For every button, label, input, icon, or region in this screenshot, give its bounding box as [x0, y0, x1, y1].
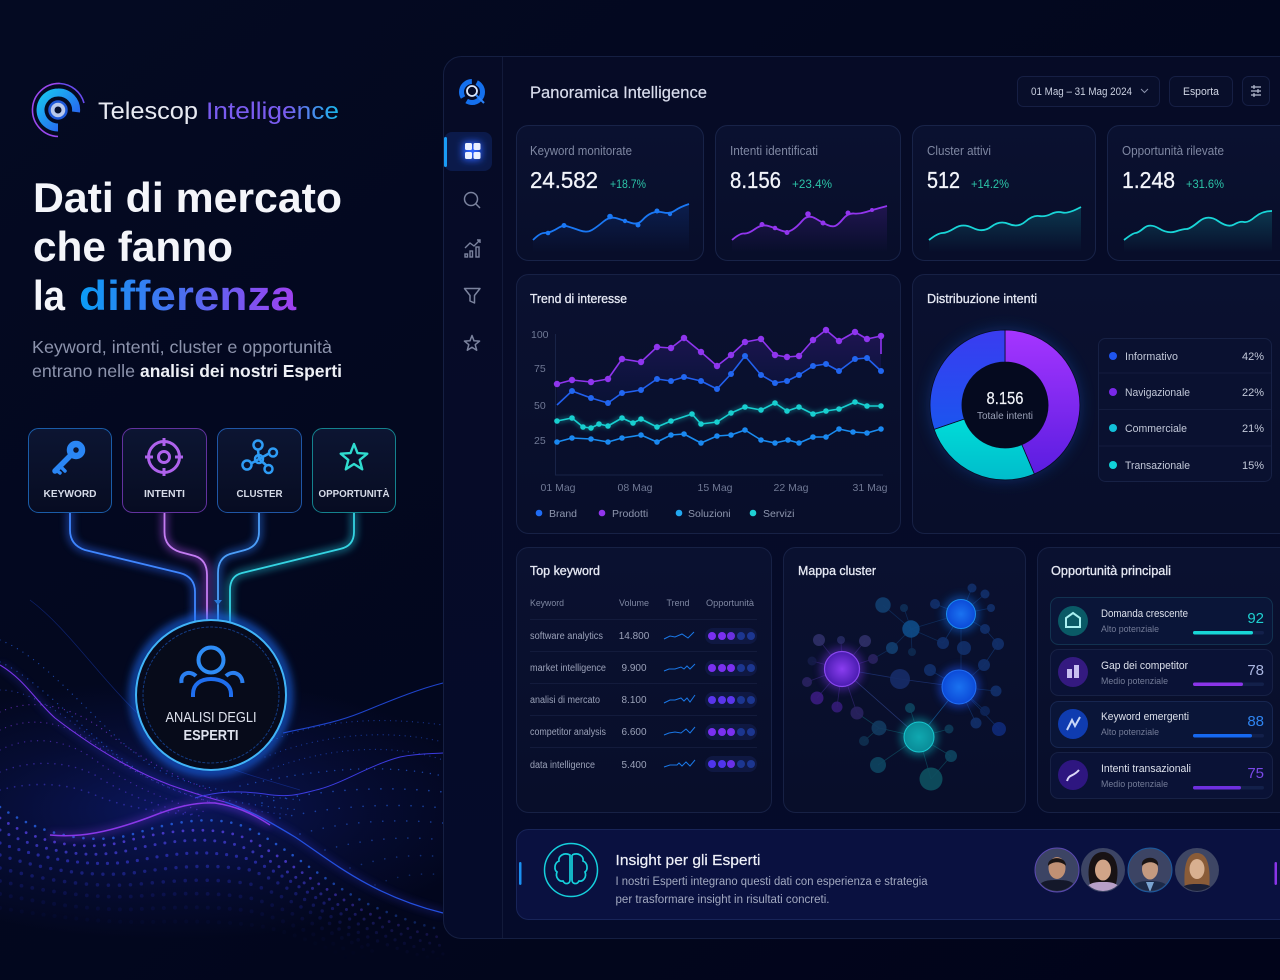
kpi card: intenti: 8.156: [730, 167, 781, 193]
table rows: data intelligence: [530, 760, 595, 771]
opportunity: intenti transazionali: Intenti transazionali: [1101, 763, 1191, 775]
donut chart: Totale intenti: [977, 410, 1033, 422]
chart legend: Servizi: [763, 508, 795, 520]
brand name: Intelligence: [206, 98, 339, 125]
avatar 3: [1128, 848, 1172, 895]
chart legend: [536, 508, 795, 520]
opportunity: gap competitor: Gap dei competitor: [1101, 660, 1188, 672]
icon: key: [55, 444, 82, 473]
kpi card: cluster: 512: [927, 167, 960, 193]
table header: Opportunità: [706, 598, 755, 609]
box: opportunita: OPPORTUNITÀ: [318, 487, 390, 500]
insight text: per trasformare insight in risultati concreti.: [616, 894, 830, 906]
chart legend: Prodotti: [612, 508, 648, 520]
sidebar: [444, 82, 492, 350]
sparkline: [929, 207, 1081, 252]
avatar 1: [1035, 848, 1079, 895]
main headline: che fanno: [33, 223, 233, 270]
opportunity: intenti transazionali: Medio potenziale: [1101, 779, 1168, 790]
donut legend: Transazionale: [1125, 460, 1190, 472]
kpi card: opportunita: [1108, 126, 1280, 260]
x axis labels: 31 Mag: [852, 482, 888, 494]
panel: top keywords: [516, 548, 772, 812]
experts hub circle: [134, 600, 288, 772]
kpi card: intenti: Intenti identificati: [730, 144, 818, 158]
export button: Esporta: [1183, 86, 1220, 98]
settings button: [1242, 76, 1270, 106]
opportunity: domanda crescente: 92: [1247, 610, 1264, 627]
dashboard title: Panoramica Intelligence: [530, 83, 707, 102]
subheading: Keyword, intenti, cluster e opportunità: [32, 337, 332, 357]
donut legend: [1098, 338, 1272, 482]
main headline: [33, 174, 342, 319]
icon: star: [341, 444, 367, 469]
table rows: market intelligence: [530, 663, 606, 674]
opportunity: gap competitor: [1050, 650, 1272, 696]
sparkline: [732, 206, 887, 252]
x axis labels: 08 Mag: [617, 482, 653, 494]
table rows: 8.100: [621, 695, 647, 706]
brand name: [98, 98, 339, 125]
opportunity: domanda crescente: [1050, 598, 1272, 644]
sparkline: [533, 204, 689, 252]
box: cluster: CLUSTER: [236, 488, 283, 500]
kpi card: keyword: 24.582: [530, 167, 598, 193]
donut chart: [930, 330, 1080, 480]
panel: main opportunities: [1038, 548, 1280, 812]
opportunity: keyword emergenti: 88: [1247, 713, 1264, 730]
kpi card: keyword: Keyword monitorate: [530, 144, 632, 158]
table header: [530, 598, 755, 609]
opportunity: domanda crescente: Domanda crescente: [1101, 608, 1188, 620]
export button: [1170, 76, 1232, 106]
kpi card: intenti: [716, 126, 900, 260]
table rows: analisi di mercato: [530, 695, 600, 706]
icon: network: [242, 440, 277, 473]
insight text: [616, 852, 928, 906]
main headline: Dati di mercato: [33, 174, 342, 221]
main headline: la: [33, 272, 66, 319]
box: intenti: INTENTI: [144, 488, 185, 500]
panel: cluster map: Mappa cluster: [798, 563, 877, 578]
icon: app logo: [462, 82, 484, 103]
x axis labels: 15 Mag: [697, 482, 733, 494]
kpi card: keyword: +18.7%: [610, 177, 646, 191]
icon: target: [145, 438, 183, 476]
opportunity: keyword emergenti: Keyword emergenti: [1101, 711, 1189, 723]
avatar 2: [1081, 848, 1125, 895]
brand logo: [32, 83, 84, 136]
table header: Volume: [619, 598, 649, 609]
donut chart: 8.156: [986, 388, 1024, 408]
dashboard panel: [444, 56, 1280, 938]
row sparklines: [664, 632, 695, 767]
date range control: [1018, 76, 1160, 106]
table header: Keyword: [530, 598, 564, 609]
table rows: 5.400: [621, 760, 647, 771]
icon: brain: [544, 844, 598, 896]
x axis labels: 01 Mag: [540, 482, 576, 494]
opportunity scores: [705, 628, 757, 772]
y axis labels: 50: [534, 400, 546, 412]
active nav item: [444, 132, 492, 171]
panel: trend chart: Trend di interesse: [530, 291, 627, 306]
x axis labels: 22 Mag: [773, 482, 809, 494]
box: keyword: KEYWORD: [44, 488, 97, 500]
box: opportunita: [312, 428, 396, 512]
opportunity: keyword emergenti: Alto potenziale: [1101, 727, 1159, 738]
panel: intent distribution: [912, 274, 1280, 534]
chart legend: Soluzioni: [688, 508, 731, 520]
y axis labels: 100: [531, 329, 549, 341]
panel: main opportunities: Opportunità principali: [1051, 563, 1171, 578]
opportunity: intenti transazionali: [1050, 752, 1272, 798]
table rows: 6.600: [621, 727, 647, 738]
x axis labels: [540, 482, 888, 494]
panel: trend chart: [516, 274, 900, 534]
donut legend: Informativo: [1125, 351, 1178, 363]
line chart: [557, 330, 881, 443]
y axis labels: 75: [534, 363, 546, 375]
opportunity: intenti transazionali: 75: [1247, 765, 1264, 782]
opportunity: domanda crescente: Alto potenziale: [1101, 624, 1159, 635]
opportunity: gap competitor: Medio potenziale: [1101, 676, 1168, 687]
donut legend: 42%: [1242, 351, 1264, 363]
subheading: entrano nelle: [32, 361, 135, 381]
date range control: 01 Mag – 31 Mag 2024: [1031, 86, 1132, 98]
connectors to experts: [70, 512, 354, 622]
subheading: [32, 337, 342, 381]
box: cluster: [218, 428, 302, 512]
table rows: competitor analysis: [530, 727, 606, 738]
chart legend: Brand: [549, 508, 577, 520]
table header: Trend: [666, 598, 690, 609]
insight text: Insight per gli Esperti: [616, 852, 760, 869]
expert avatars: [1035, 848, 1219, 895]
donut legend: Navigazionale: [1125, 387, 1190, 399]
hub label: [166, 710, 256, 744]
dim nodes: [802, 584, 1006, 790]
kpi card: opportunita: +31.6%: [1186, 177, 1224, 191]
opportunity: gap competitor: 78: [1247, 662, 1264, 679]
hub label: ESPERTI: [184, 728, 238, 744]
table rows: 9.900: [621, 663, 647, 674]
donut legend: Commerciale: [1125, 423, 1187, 435]
sparkline: [1124, 211, 1272, 252]
table rows: software analytics: [530, 631, 603, 642]
y axis labels: [531, 329, 549, 447]
kpi card: opportunita: Opportunità rilevate: [1122, 144, 1224, 158]
box: intenti: [122, 428, 206, 512]
kpi card: cluster: Cluster attivi: [927, 144, 991, 158]
kpi card: intenti: +23.4%: [792, 177, 832, 191]
insight banner: [516, 830, 1280, 920]
donut legend: 22%: [1242, 387, 1264, 399]
kpi card: opportunita: 1.248: [1122, 167, 1175, 193]
icon: filter: [464, 288, 480, 303]
icon: chart: [465, 240, 480, 257]
table rows: 14.800: [619, 631, 650, 642]
y axis labels: 25: [534, 435, 546, 447]
table rows: [530, 631, 650, 771]
decorative particle wave: [0, 600, 444, 954]
kpi card: cluster: [912, 126, 1096, 260]
panel: top keywords: Top keyword: [530, 563, 600, 578]
subheading: analisi dei nostri Esperti: [140, 361, 342, 381]
icon: search: [464, 192, 480, 208]
opportunity: keyword emergenti: [1050, 702, 1272, 748]
box: keyword: [28, 428, 112, 512]
main headline: differenza: [79, 272, 297, 319]
insight text: I nostri Esperti integrano questi dati con esperienza e strategia: [616, 876, 928, 888]
icon: people: [181, 648, 242, 697]
donut legend: 21%: [1242, 423, 1264, 435]
donut legend: 15%: [1242, 460, 1264, 472]
kpi card: keyword: [516, 126, 704, 260]
panel: intent distribution: Distribuzione intenti: [927, 291, 1037, 306]
kpi card: cluster: +14.2%: [971, 177, 1009, 191]
hub nodes: [820, 595, 980, 756]
panel: cluster map: [784, 548, 1026, 812]
hub label: ANALISI DEGLI: [166, 710, 256, 726]
avatar 4: [1175, 848, 1219, 895]
network edges: [807, 588, 999, 779]
brand name: Telescop: [98, 98, 198, 125]
icon: star nav: [464, 336, 480, 350]
